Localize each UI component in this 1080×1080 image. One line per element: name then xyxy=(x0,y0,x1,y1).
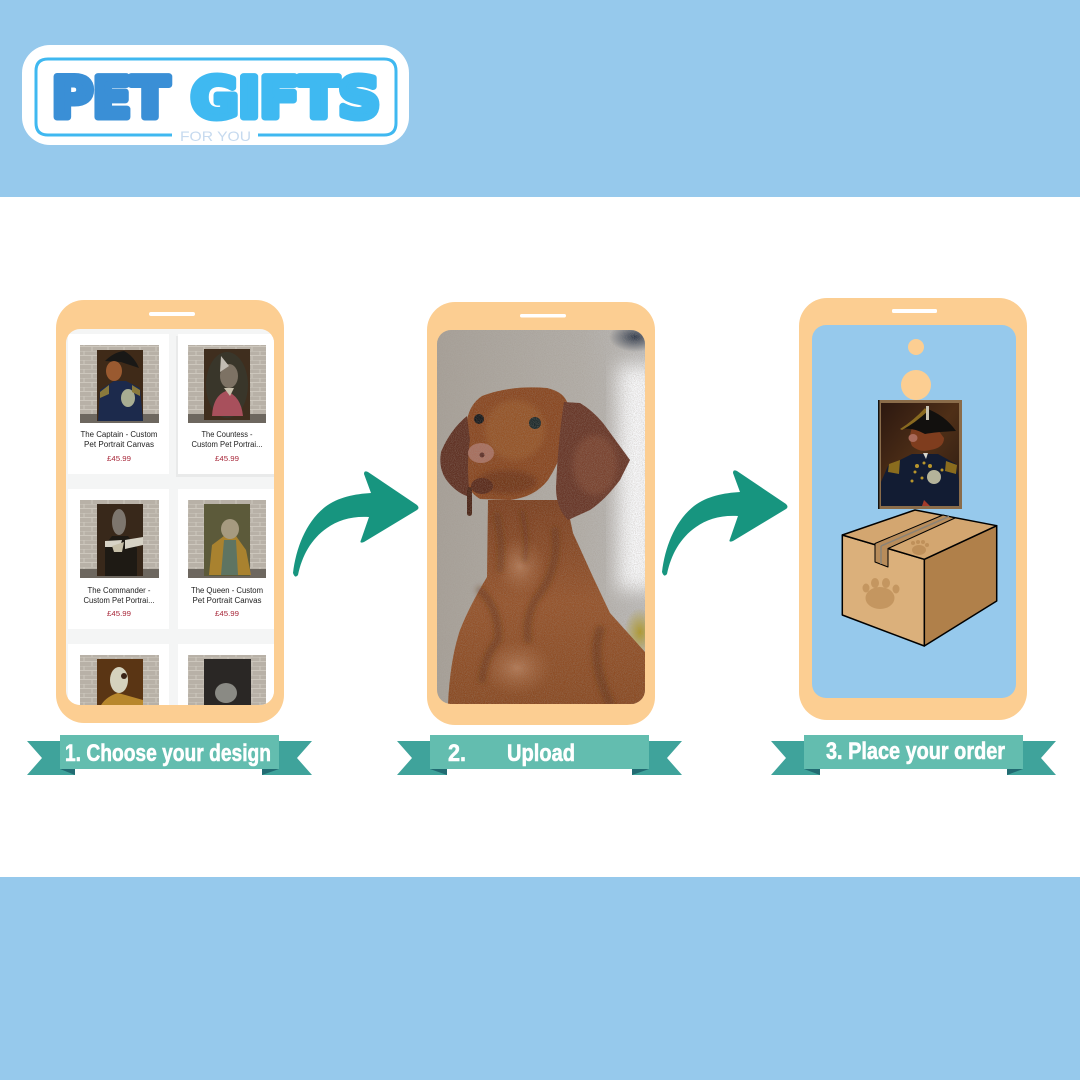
paw on box front xyxy=(862,578,900,609)
card: The Countess: The Countess - xyxy=(202,430,253,439)
ribbon label: Upload xyxy=(507,740,575,767)
card: The Queen xyxy=(178,489,276,629)
card: The Captain: The Captain - Custom xyxy=(80,430,158,439)
ribbon folds xyxy=(430,769,649,775)
phone speaker xyxy=(520,314,566,318)
dog body xyxy=(448,500,645,704)
dog ear left xyxy=(440,416,470,497)
ribbon label: 3. Place your order xyxy=(826,738,1005,765)
card: The Commander xyxy=(68,489,169,629)
header band xyxy=(0,0,1080,197)
ribbon tails xyxy=(771,741,1056,775)
card: The Commander: Custom Pet Portrai... xyxy=(84,596,154,605)
arrow 1 xyxy=(293,471,418,577)
phone 3: place order xyxy=(799,298,1027,720)
dog body shading xyxy=(480,512,610,704)
ribbon folds xyxy=(60,769,279,775)
dog muzzle and nose xyxy=(468,443,494,463)
card: The Queen: £45.99 xyxy=(215,609,239,618)
ribbon number: 2. xyxy=(448,740,466,767)
dog photo xyxy=(437,322,661,704)
ribbon tails xyxy=(397,741,682,775)
card: The Countess: £45.99 xyxy=(215,454,239,463)
box tape xyxy=(875,515,955,567)
card: The Countess: Custom Pet Portrai... xyxy=(192,440,262,449)
card: The Queen: Pet Portrait Canvas xyxy=(192,596,262,605)
ribbon band xyxy=(60,735,279,769)
phone 1: choose a design xyxy=(56,300,284,723)
card: The Captain: £45.99 xyxy=(107,454,131,463)
phone 2: upload photo xyxy=(427,302,661,725)
dog eyes xyxy=(474,414,484,424)
cardboard box xyxy=(842,510,997,646)
card: The Commander: £45.99 xyxy=(107,609,131,618)
card: partial row, dark cat xyxy=(178,644,274,705)
logo word: PET: PET xyxy=(52,66,169,130)
product grid screen xyxy=(66,329,276,715)
card: The Queen: The Queen - Custom xyxy=(191,586,263,595)
logo: Pet Gifts For You xyxy=(22,45,409,145)
ribbon band xyxy=(430,735,649,769)
dog drool xyxy=(467,487,472,516)
ribbon 2 xyxy=(397,735,682,775)
footer band xyxy=(0,877,1080,1080)
bubble small xyxy=(908,339,924,355)
box right face xyxy=(924,526,997,646)
card: The Captain xyxy=(68,334,169,474)
logo tagline: FOR YOU xyxy=(180,128,251,144)
paw on box top xyxy=(911,540,929,555)
phone screen xyxy=(812,325,1016,698)
ribbon 1 xyxy=(27,735,312,775)
ribbon 3 xyxy=(771,735,1056,775)
box front face xyxy=(842,535,924,646)
ribbon folds xyxy=(804,769,1023,775)
ribbon tails xyxy=(27,741,312,775)
phone frame xyxy=(799,298,1027,720)
photo grain xyxy=(437,330,645,704)
ribbon band xyxy=(804,735,1023,769)
dog ear right xyxy=(556,402,630,520)
arrow 2 xyxy=(662,470,788,576)
phone frame xyxy=(56,300,284,723)
bubble large xyxy=(901,370,931,400)
card: The Countess xyxy=(176,334,276,477)
phone frame xyxy=(427,302,655,725)
phone speaker xyxy=(149,312,195,316)
logo word: GIFTS: GIFTS xyxy=(191,66,380,130)
dog head xyxy=(463,387,568,500)
box top face xyxy=(842,510,997,559)
card: partial row, dalmatian xyxy=(68,644,169,705)
phone speaker xyxy=(892,309,937,313)
framed portrait of dog captain xyxy=(878,400,962,509)
card: The Captain: Pet Portrait Canvas xyxy=(84,440,154,449)
ribbon label: 1. Choose your design xyxy=(65,740,271,767)
card: The Commander: The Commander - xyxy=(88,586,151,595)
